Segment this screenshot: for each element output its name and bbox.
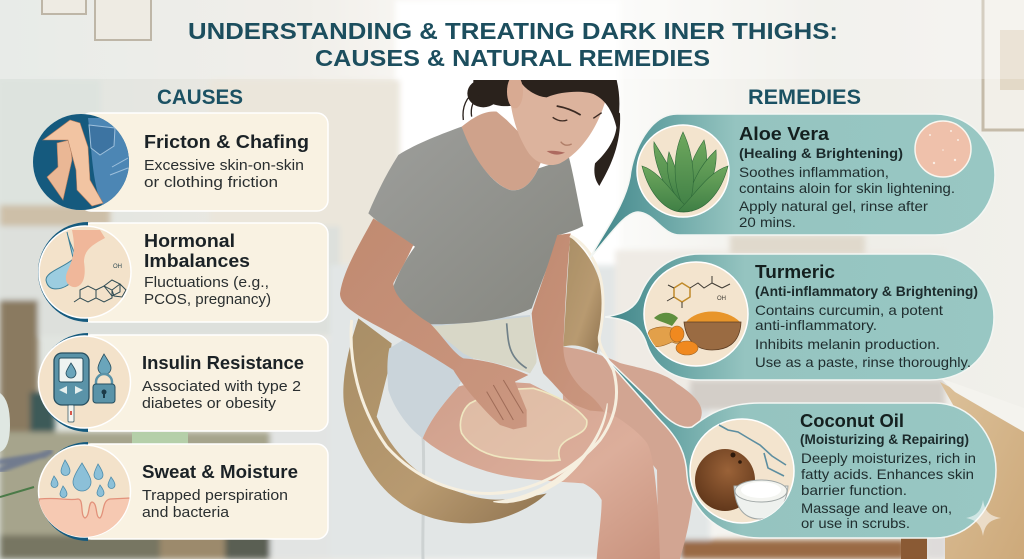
text: coconut oil: Coconut Oil <box>800 410 904 431</box>
head with face and hair <box>463 75 620 186</box>
text: sweat <box>142 461 298 521</box>
title: UNDERSTANDING & TREATING DARK INER THIGHS: <box>188 18 838 44</box>
text: insulin <box>142 352 304 412</box>
heading: causes: CAUSES <box>157 86 243 109</box>
text: turmeric <box>755 261 978 370</box>
far leg <box>560 347 702 559</box>
bed leg <box>901 538 927 559</box>
panel: remedy turmeric <box>605 254 994 380</box>
text: turmeric: anti-inflammatory. <box>755 317 877 333</box>
panel: cause 3 insulin resistance <box>38 333 328 432</box>
baseboard <box>940 378 1024 432</box>
cream ring outline <box>351 236 617 493</box>
icon: hormone glands and molecule: OH <box>113 264 122 270</box>
text: coconut oil <box>800 410 976 531</box>
text: coconut oil: Massage and leave on, <box>801 500 952 516</box>
finger lines <box>487 380 523 420</box>
text: coconut oil: or use in scrubs. <box>801 515 910 531</box>
text: sweat: and bacteria <box>142 505 230 521</box>
text: turmeric: Use as a paste, rinse thoroughly. <box>755 354 971 370</box>
icon: hormone glands and molecule <box>46 230 126 302</box>
right arm and hand <box>532 233 604 412</box>
text: friction: Fricton & Chafing <box>144 131 309 152</box>
panel: cause 4 sweat and moisture <box>38 442 328 541</box>
cream ring inner sweep <box>493 403 607 503</box>
text: aloe vera: Soothes inflammation, <box>739 164 889 180</box>
icon: glucose meter, drop and lock <box>54 353 115 422</box>
title <box>188 18 838 71</box>
text: turmeric: (Anti-inflammatory & Brightening) <box>755 284 978 299</box>
text: insulin: diabetes or obesity <box>142 396 277 412</box>
icon: coconut, bowl of oil and fatty acid chain <box>695 425 788 519</box>
icon: aloe plant <box>642 132 728 212</box>
text: sweat: Sweat & Moisture <box>142 461 298 482</box>
text: aloe vera: Aloe Vera <box>739 123 830 144</box>
title: CAUSES & NATURAL REMEDIES <box>315 45 710 71</box>
gold brush swash <box>343 237 603 523</box>
text: aloe vera: Apply natural gel, rinse after <box>739 198 928 214</box>
panel: cause 2 hormonal imbalances <box>38 222 328 322</box>
woman applying gel with gold swash <box>340 75 702 559</box>
icon: curcumin, turmeric root and bowl <box>647 276 741 355</box>
shorts <box>387 315 537 438</box>
picture frames <box>42 0 1024 130</box>
text: friction: or clothing friction <box>144 175 278 191</box>
text: hormonal <box>144 230 271 308</box>
vase and lavender <box>0 393 188 497</box>
text: aloe vera <box>739 123 955 230</box>
near leg and thigh <box>423 382 660 559</box>
text: coconut oil: barrier function. <box>801 482 907 498</box>
panel: remedy aloe vera <box>590 114 995 258</box>
text: turmeric: Contains curcumin, a potent <box>755 302 943 318</box>
text: aloe vera: 20 mins. <box>739 214 796 230</box>
icon: sweat drops over skin <box>39 460 130 540</box>
icon: sparkle <box>966 500 1001 536</box>
text: aloe vera: contains aloin for skin lightening. <box>739 180 955 196</box>
text: hormonal: PCOS, pregnancy) <box>144 292 271 308</box>
text: aloe vera: (Healing & Brightening) <box>739 146 903 161</box>
left arm and hand <box>340 218 528 429</box>
panel: cause 1 friction and chafing <box>33 113 328 215</box>
heading: remedies: REMEDIES <box>748 86 861 109</box>
shirt <box>368 127 583 324</box>
text: coconut oil: fatty acids. Enhances skin <box>801 466 974 482</box>
icon: legs and denim <box>42 118 129 206</box>
text: hormonal: Imbalances <box>144 250 250 271</box>
text: turmeric: Turmeric <box>755 261 835 282</box>
text: insulin: Associated with type 2 <box>142 379 301 395</box>
text: sweat: Trapped perspiration <box>142 488 288 504</box>
text: friction: Excessive skin-on-skin <box>144 158 304 174</box>
title band <box>0 0 1024 79</box>
neck <box>462 111 543 190</box>
text: hormonal: Fluctuations (e.g., <box>144 275 269 291</box>
text: coconut oil: Deeply moisturizes, rich in <box>801 450 976 466</box>
icon: curcumin, turmeric root and bowl: OH <box>717 296 726 302</box>
floor <box>940 382 1024 559</box>
text: insulin: Insulin Resistance <box>142 352 304 373</box>
icon: skin swatch <box>915 121 971 177</box>
panel: remedy coconut oil <box>600 352 996 538</box>
text: coconut oil: (Moisturizing & Repairing) <box>800 432 969 447</box>
seat fold in bedding <box>421 435 425 559</box>
text: turmeric: Inhibits melanin production. <box>755 336 940 352</box>
text: friction <box>144 131 309 191</box>
text: hormonal: Hormonal <box>144 230 235 251</box>
gel patch <box>460 388 587 461</box>
